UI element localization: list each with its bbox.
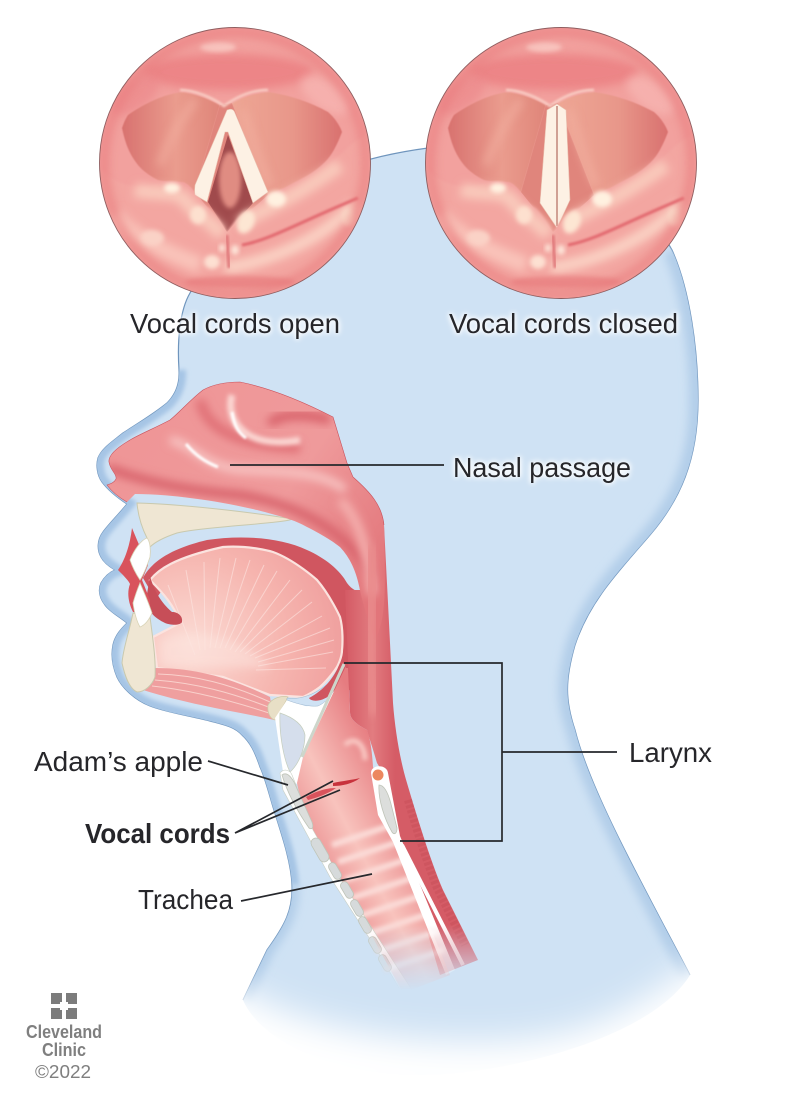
label: Adam's apple with leader: [34, 746, 288, 785]
under-tongue pocket: [146, 576, 182, 625]
label: vocal cords open: Vocal cords open: [130, 308, 340, 339]
oral cavity dark band: [143, 537, 372, 690]
back cartilage: [371, 766, 463, 975]
label: Adam's apple with leader: Adam’s apple: [34, 746, 203, 777]
hyoid bone: [268, 696, 288, 720]
lower jaw bone: [122, 613, 155, 692]
larynx and trachea: [297, 664, 450, 993]
nasal passage: [106, 382, 384, 608]
upper jaw bone: [137, 503, 293, 547]
label: larynx with bracket: [344, 663, 712, 841]
label: nasal passage with leader: Nasal passage: [453, 452, 631, 483]
logo: Cleveland Clinic: ©2022: [35, 1062, 91, 1082]
vocal cords side view: [306, 778, 360, 800]
teeth and lips: [118, 528, 152, 627]
circle: vocal cords closed: [422, 28, 701, 302]
circle: vocal cords open: [96, 28, 375, 302]
epiglottis: [309, 663, 346, 701]
label: trachea with leader: [138, 874, 372, 915]
bottom fade: [170, 930, 780, 1107]
label: vocal cords with leaders: Vocal cords: [85, 818, 230, 849]
label: trachea with leader: Trachea: [138, 884, 233, 915]
floor of mouth muscle: [143, 668, 274, 720]
front cartilage chain: [280, 770, 402, 980]
pharynx highlight blend: [370, 545, 374, 715]
label: larynx with bracket: Larynx: [629, 737, 712, 768]
head silhouette: [97, 147, 698, 1075]
tongue: [150, 547, 342, 697]
pharynx and oesophagus band: [348, 526, 478, 975]
logo: Cleveland Clinic: Clinic: [42, 1040, 86, 1060]
logo: Cleveland Clinic: [26, 993, 102, 1082]
logo: Cleveland Clinic: Cleveland: [26, 1022, 102, 1042]
label: vocal cords with leaders: [85, 781, 340, 849]
label: vocal cords closed: Vocal cords closed: [449, 308, 678, 339]
thyroid membrane and white space: [275, 665, 348, 785]
